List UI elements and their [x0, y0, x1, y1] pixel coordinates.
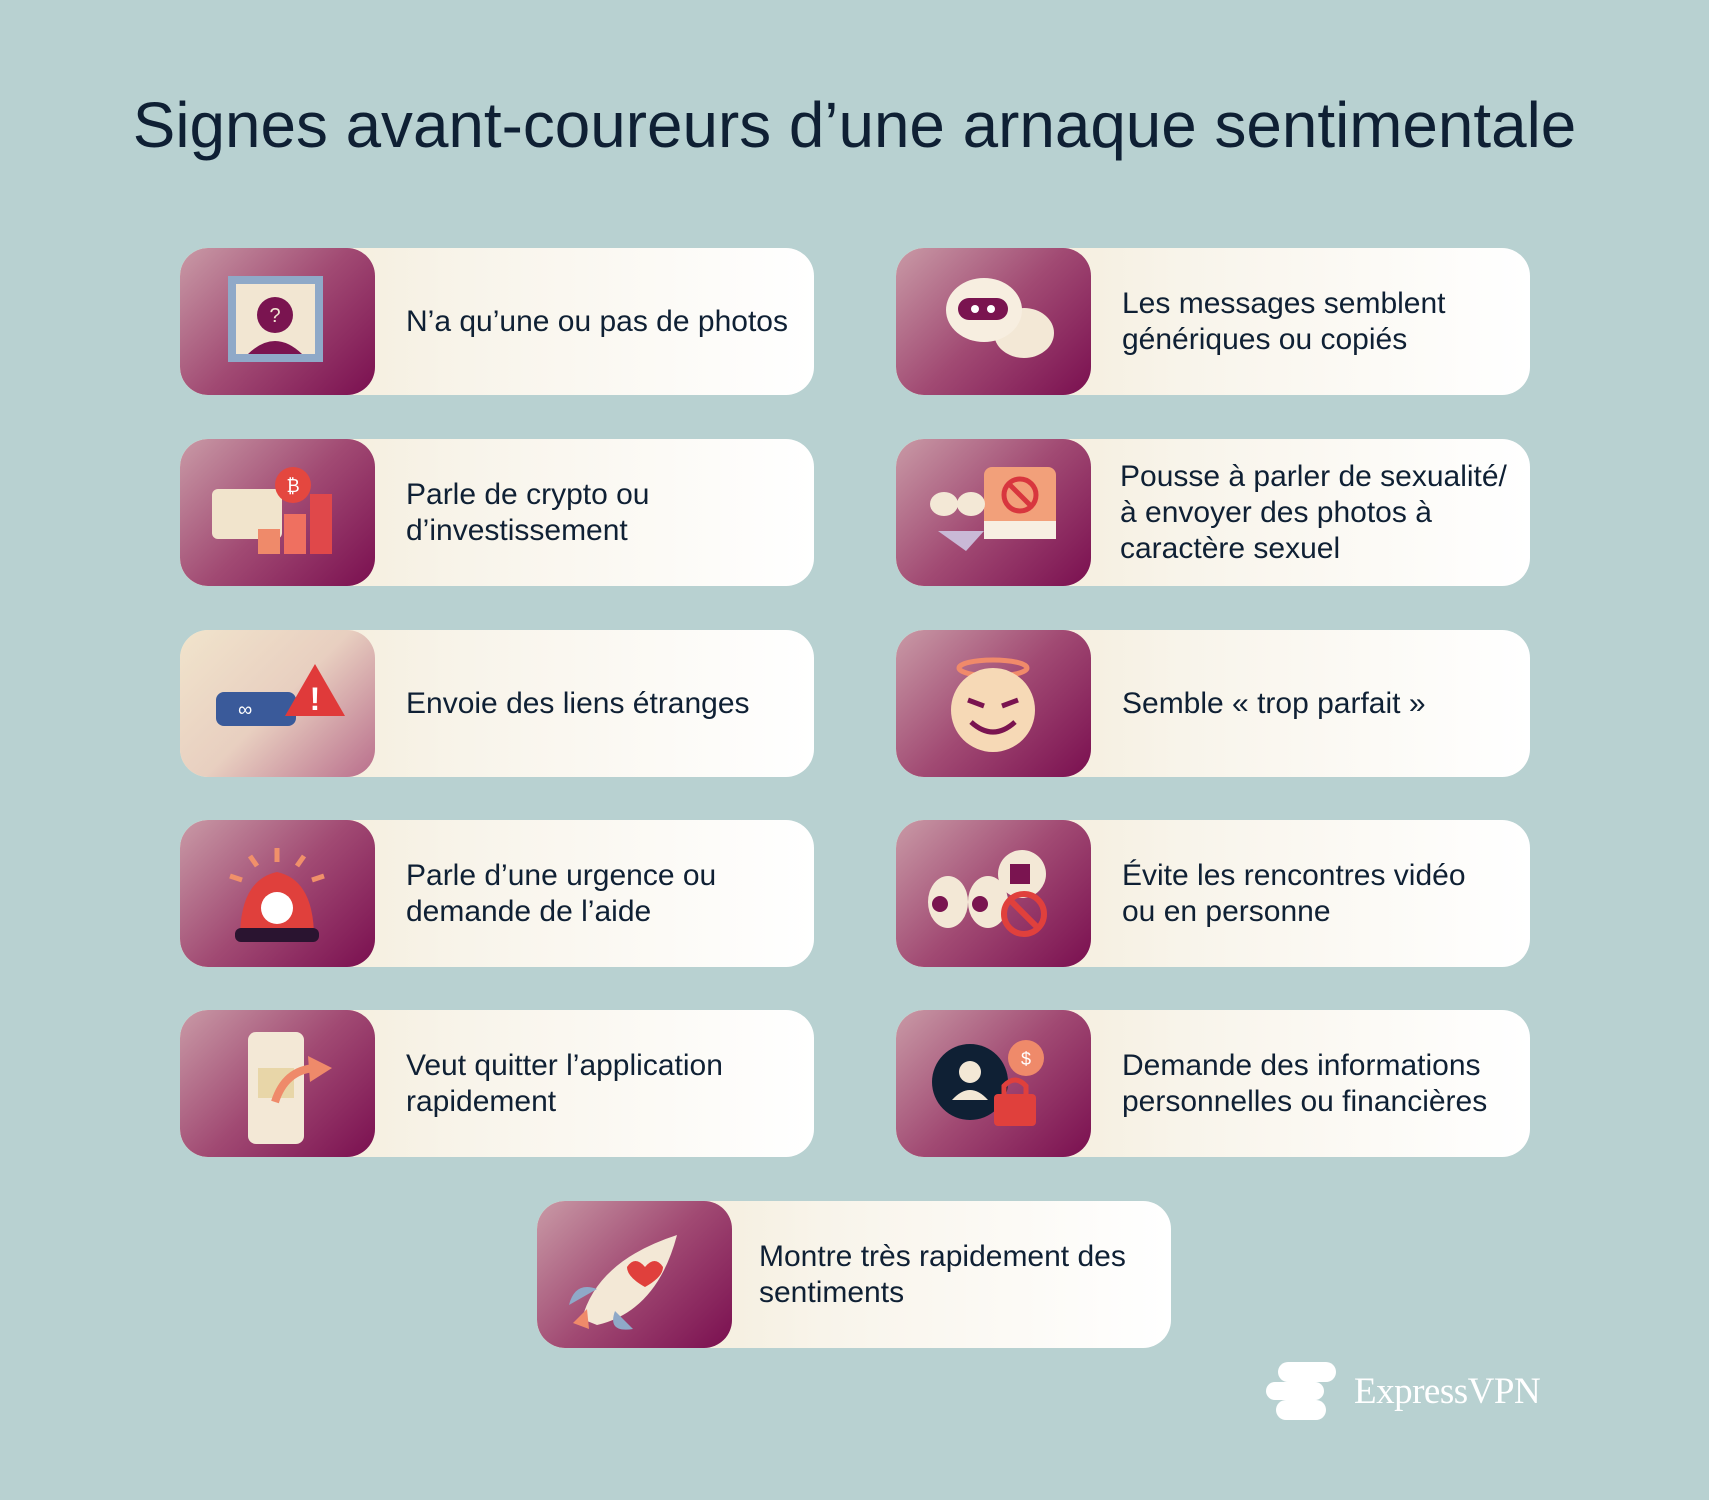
- card: messages: [896, 248, 1530, 395]
- card: urgency: [180, 820, 814, 967]
- text: [406, 858, 716, 928]
- text: Demande des informations: [1122, 1048, 1481, 1082]
- icon: briefcase and chart: ₿: [286, 476, 300, 496]
- logo: ExpressVPN: ExpressVPN: [1354, 1371, 1540, 1412]
- icon: portrait: ?: [269, 305, 281, 327]
- icon: briefcase and chart: [180, 439, 375, 586]
- icon: link warning: ∞: [238, 699, 252, 721]
- text: [1122, 1048, 1487, 1118]
- card: video: [896, 820, 1530, 967]
- card: leave app: [180, 1010, 814, 1157]
- text: Envoie des liens étranges: [406, 686, 750, 720]
- text: N’a qu’une ou pas de photos: [406, 304, 788, 338]
- text: à envoyer des photos à: [1120, 496, 1432, 528]
- icon: user lock money: $: [1021, 1049, 1031, 1069]
- text: [406, 1048, 723, 1118]
- text: Pousse à parler de sexualité/: [1120, 460, 1507, 492]
- text: rapidement: [406, 1084, 556, 1118]
- text: génériques ou copiés: [1122, 322, 1407, 356]
- card: personal info: [896, 1010, 1530, 1157]
- text: personnelles ou financières: [1122, 1084, 1487, 1118]
- logo: ExpressVPN: [1266, 1362, 1540, 1420]
- icon: user lock money: [896, 1010, 1091, 1157]
- text: ou en personne: [1122, 894, 1331, 928]
- icon: link warning: !: [310, 681, 320, 717]
- icon: siren: [180, 820, 375, 967]
- card: too perfect: [896, 630, 1530, 777]
- text: [759, 1240, 1126, 1308]
- text: Semble « trop parfait »: [1122, 686, 1426, 720]
- text: d’investissement: [406, 514, 628, 546]
- icon: phone arrow: [180, 1010, 375, 1157]
- icon: chat bubbles: [896, 248, 1091, 395]
- text: Montre très rapidement des: [759, 1240, 1126, 1272]
- text: Veut quitter l’application: [406, 1048, 723, 1082]
- text: sentiments: [759, 1276, 904, 1308]
- icon: lingerie with ban: [896, 439, 1091, 586]
- text: [406, 478, 649, 546]
- text: [1122, 858, 1466, 928]
- icon: rocket heart: [537, 1201, 732, 1348]
- text: Les messages semblent: [1122, 286, 1446, 320]
- card: sexual: [896, 439, 1530, 586]
- text: [1120, 460, 1507, 564]
- text: Parle de crypto ou: [406, 478, 649, 510]
- card: feelings: [537, 1201, 1171, 1348]
- text: demande de l’aide: [406, 894, 651, 928]
- card: photos: [180, 248, 814, 395]
- icon: portrait: [180, 248, 375, 395]
- icon: link warning: [180, 630, 375, 777]
- text: Évite les rencontres vidéo: [1122, 858, 1466, 892]
- title: Signes avant-coureurs d’une arnaque sentimentale: [133, 89, 1576, 161]
- text: caractère sexuel: [1120, 532, 1340, 564]
- card: links: [180, 630, 814, 777]
- icon: angel face: [896, 630, 1091, 777]
- text: Parle d’une urgence ou: [406, 858, 716, 892]
- text: [1122, 286, 1446, 356]
- icon: eyes with ban: [896, 820, 1091, 967]
- card: crypto: [180, 439, 814, 586]
